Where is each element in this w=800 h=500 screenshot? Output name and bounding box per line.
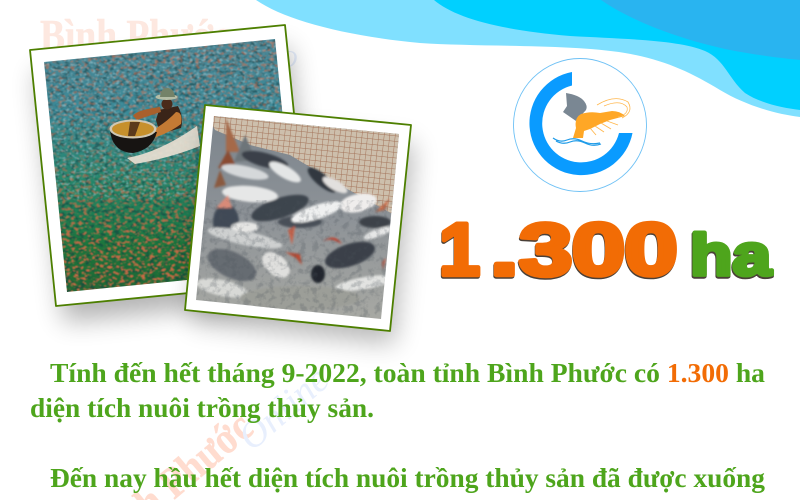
watermark: lower rotated: Online bbox=[230, 358, 337, 459]
watermark: top bbox=[40, 11, 297, 73]
basin bbox=[110, 130, 157, 153]
icon: fish bbox=[563, 93, 587, 121]
photo frame: catfish in net bbox=[185, 105, 414, 344]
red fins and gills bbox=[216, 195, 232, 208]
headline figure: 1.300 ha: 1 bbox=[438, 210, 480, 292]
background waves bbox=[256, 0, 800, 117]
white bellies bbox=[220, 162, 270, 181]
logo: fish and shrimp bbox=[514, 58, 646, 192]
photo frame: farmer feeding fish bbox=[30, 25, 316, 322]
paragraph: total area bbox=[30, 358, 765, 493]
headline figure: 1.300 ha: ha bbox=[690, 224, 772, 289]
paragraph: total area: Tính đến hết tháng 9-2022, toàn tỉnh Bình Phước có 1.300 ha bbox=[50, 358, 765, 388]
paragraph: total area: diện tích nuôi trồng thủy sản. bbox=[30, 393, 374, 423]
headline figure: 1.300 ha: 1 bbox=[439, 208, 480, 291]
ring arc bbox=[529, 72, 632, 175]
photo: catfish bbox=[196, 116, 399, 319]
headline figure: 1.300 ha: ha bbox=[690, 222, 773, 288]
photo: farmer in pond bbox=[44, 39, 282, 292]
headline figure: 1.300 ha bbox=[438, 208, 773, 293]
headline figure: 1.300 ha: . bbox=[490, 211, 518, 293]
clipped next line bbox=[0, 495, 800, 500]
icon: shrimp bbox=[573, 99, 630, 138]
headline figure: 1.300 ha: 300 bbox=[519, 209, 677, 291]
watermark: top: O bbox=[280, 47, 297, 73]
splash bbox=[127, 126, 200, 164]
headline figure: 1.300 ha: . bbox=[490, 209, 519, 291]
paragraph: stocking status: Đến nay hầu hết diện tích nuôi trồng thủy sản đã được xuống bbox=[50, 463, 765, 493]
man bbox=[156, 106, 182, 134]
headline figure: 1.300 ha: 300 bbox=[518, 210, 677, 293]
dorsal fins bbox=[226, 118, 240, 152]
watermark: top: Bình Phước bbox=[40, 11, 230, 60]
watermark: lower rotated bbox=[81, 358, 337, 500]
icon: water waves bbox=[553, 138, 601, 145]
dark backs bbox=[241, 150, 289, 170]
